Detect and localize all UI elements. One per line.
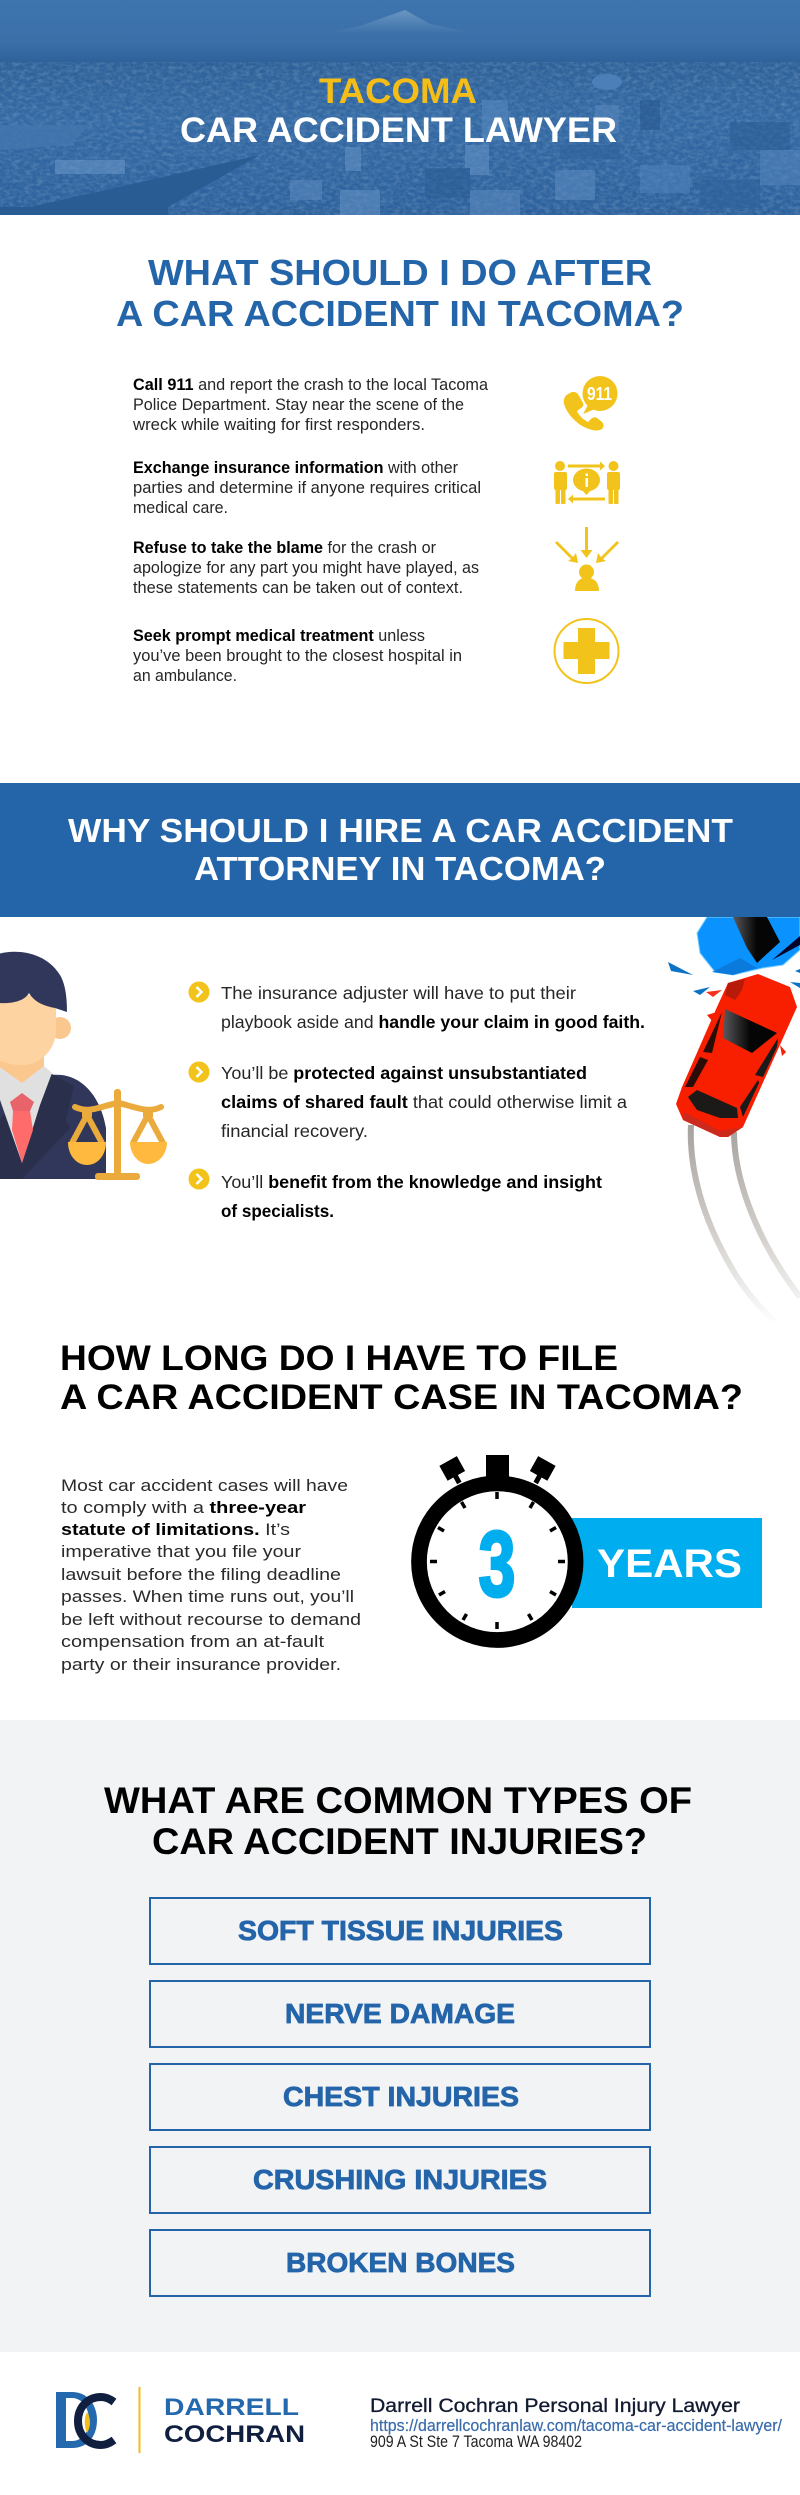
reason 3 — [188, 1168, 602, 1221]
icon: scales of justice — [68, 1089, 167, 1180]
body paragraph: statute of limitations. It’s — [61, 1520, 290, 1539]
logo mark — [56, 2392, 114, 2448]
panel: filing deadline — [60, 1339, 762, 1674]
heading: WHAT ARE COMMON TYPES OF — [104, 1780, 692, 1821]
reason 1 — [188, 982, 645, 1032]
reason 3: You’ll benefit from the knowledge and insight — [221, 1172, 602, 1192]
heading: WHY SHOULD I HIRE A CAR ACCIDENT — [68, 812, 733, 849]
panel: reasons to hire — [188, 982, 645, 1221]
logo wordmark — [164, 2394, 305, 2448]
body paragraph: compensation from an at-fault — [61, 1632, 324, 1651]
step: refuse blame: apologize for any part you might have played, as — [133, 558, 479, 577]
body paragraph — [61, 1476, 361, 1674]
heading: WHAT SHOULD I DO AFTER — [148, 252, 652, 293]
body paragraph: be left without recourse to demand — [61, 1610, 361, 1629]
body paragraph: imperative that you file your — [61, 1542, 301, 1561]
reason 2 — [188, 1062, 627, 1141]
injury: nerve damage: NERVE DAMAGE — [285, 1998, 515, 2029]
blue car — [697, 917, 800, 975]
icon: exchanging information — [554, 461, 620, 504]
injury: chest — [150, 2064, 650, 2130]
step: exchange insurance — [133, 458, 481, 517]
skid marks — [691, 1125, 800, 1322]
step: seek treatment: you’ve been brought to the closest hospital in — [133, 646, 462, 665]
icon: phone 911: 911 — [587, 384, 612, 404]
injury: chest: CHEST INJURIES — [283, 2081, 519, 2112]
step: call 911 — [132, 375, 489, 434]
years label — [572, 1518, 762, 1608]
footer — [56, 2387, 782, 2453]
icon: stopwatch — [419, 1455, 576, 1640]
step: call 911: wreck while waiting for first responders. — [132, 415, 425, 434]
injury: crushing: CRUSHING INJURIES — [253, 2164, 547, 2195]
heading: ATTORNEY IN TACOMA? — [194, 850, 606, 887]
step: exchange insurance: parties and determine if anyone requires critical — [133, 478, 481, 497]
step: seek treatment: Seek prompt medical treatment unless — [133, 626, 425, 645]
title: Car Accident Lawyer: CAR ACCIDENT LAWYER — [180, 111, 617, 150]
stopwatch number: 3 — [478, 1512, 516, 1616]
contact details — [370, 2396, 782, 2451]
reason 2: You’ll be protected against unsubstantiated — [221, 1063, 587, 1083]
step: refuse blame — [133, 538, 479, 597]
heading: CAR ACCIDENT INJURIES? — [152, 1821, 647, 1862]
body paragraph: party or their insurance provider. — [61, 1655, 341, 1674]
illustration: car crash — [668, 917, 800, 1322]
body paragraph: to comply with a three-year — [61, 1498, 306, 1517]
step: seek treatment — [133, 626, 462, 685]
step: refuse blame: Refuse to take the blame for the crash or — [133, 538, 436, 557]
icon: arrows pointing at person — [555, 527, 619, 591]
body paragraph: Most car accident cases will have — [61, 1476, 348, 1495]
contact details: https://darrellcochranlaw.com/tacoma-car-accident-lawyer/ — [370, 2416, 782, 2435]
injury: nerve damage — [150, 1981, 650, 2047]
contact details: 909 A St Ste 7 Tacoma WA 98402 — [370, 2433, 582, 2451]
logo wordmark: DARRELL — [164, 2394, 299, 2421]
injury: soft tissue: SOFT TISSUE INJURIES — [238, 1915, 563, 1946]
body paragraph: lawsuit before the filing deadline — [61, 1565, 341, 1584]
heading — [60, 1339, 743, 1417]
crash shards — [668, 962, 800, 997]
reason 2: claims of shared fault that could otherwise limit a — [221, 1092, 627, 1112]
step: seek treatment: an ambulance. — [133, 666, 237, 685]
step: call 911: Police Department. Stay near the scene of the — [133, 395, 464, 414]
panel: common injuries — [0, 1720, 800, 2352]
heading: A CAR ACCIDENT IN TACOMA? — [116, 293, 684, 334]
reason 3: of specialists. — [221, 1201, 334, 1221]
panel: what to do after an accident — [116, 252, 684, 685]
step: call 911: Call 911 and report the crash to the local Tacoma — [133, 375, 489, 394]
heading — [116, 252, 684, 334]
heading — [104, 1780, 692, 1862]
reason 2: financial recovery. — [221, 1121, 368, 1141]
icon: phone 911 — [564, 376, 618, 430]
logo divider — [138, 2387, 140, 2453]
red car — [676, 974, 797, 1137]
heading: A CAR ACCIDENT CASE IN TACOMA? — [60, 1378, 743, 1417]
lawyer figure — [0, 952, 106, 1179]
contact details: Darrell Cochran Personal Injury Lawyer — [370, 2396, 741, 2417]
header banner — [0, 0, 800, 215]
heading: HOW LONG DO I HAVE TO FILE — [60, 1339, 618, 1378]
injury: broken bones: BROKEN BONES — [286, 2247, 515, 2278]
panel: why hire an attorney banner — [0, 783, 800, 917]
injury: crushing — [150, 2147, 650, 2213]
injury: broken bones — [150, 2230, 650, 2296]
city skyline background — [0, 0, 800, 215]
step: exchange insurance: medical care. — [133, 498, 228, 517]
reason 1: The insurance adjuster will have to put their — [221, 983, 576, 1003]
body paragraph: passes. When time runs out, you’ll — [61, 1587, 354, 1606]
step: refuse blame: these statements can be taken out of context. — [133, 578, 463, 597]
logo wordmark: COCHRAN — [164, 2421, 305, 2448]
years label: YEARS — [597, 1542, 742, 1586]
heading — [68, 812, 733, 887]
icon: medical cross — [554, 619, 618, 683]
illustration: lawyer with scales — [0, 952, 167, 1180]
injury: soft tissue — [150, 1898, 650, 1964]
step: exchange insurance: Exchange insurance information with other — [133, 458, 458, 477]
reason 1: playbook aside and handle your claim in good faith. — [221, 1012, 645, 1032]
title: Tacoma: TACOMA — [319, 72, 477, 111]
